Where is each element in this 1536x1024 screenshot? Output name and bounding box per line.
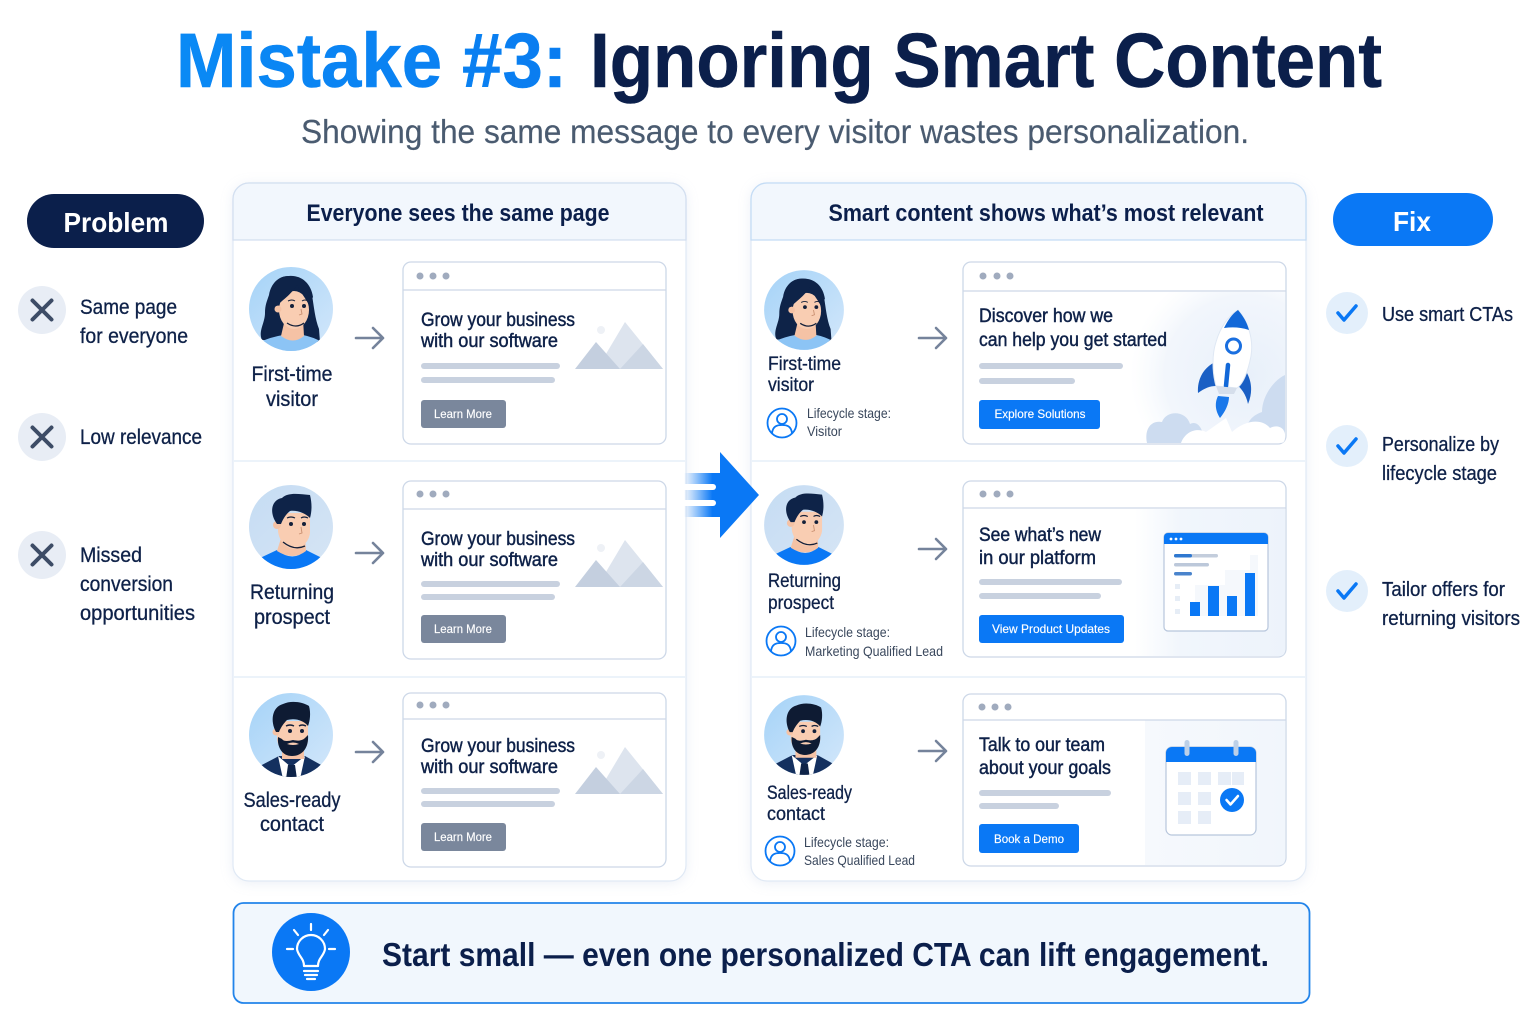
row: sales-ready contact: [764, 694, 1286, 868]
browser: generic page: with our software: [420, 550, 558, 571]
avatar: suited man: [764, 695, 844, 779]
persona label: Returning: [768, 571, 841, 592]
browser: book a demo: [963, 694, 1286, 866]
lifecycle stage: Visitor: [807, 423, 842, 439]
arrow: [919, 539, 946, 559]
fix: use smart CTAs: Use smart CTAs: [1382, 304, 1513, 326]
browser: generic page: [403, 693, 666, 867]
avatar: woman: [249, 267, 333, 355]
panel: same page: [233, 183, 686, 881]
row: returning prospect: [249, 481, 666, 659]
arrow: [919, 328, 946, 348]
panel: fix column: [1326, 193, 1520, 630]
browser: generic page: [403, 262, 666, 444]
avatar: man: [249, 485, 333, 573]
browser: discover page: Discover how we: [979, 306, 1113, 327]
persona label: visitor: [768, 375, 815, 396]
icon: lightbulb: [272, 913, 350, 991]
browser: platform updates: See what’s new: [979, 525, 1101, 546]
persona label: [250, 581, 334, 629]
problem pill: [27, 194, 204, 248]
lifecycle stage: Marketing Qualified Lead: [805, 643, 943, 659]
persona label: prospect: [768, 593, 835, 614]
fix: tailor offers: Tailor offers for: [1382, 579, 1505, 601]
panel header: [751, 183, 1306, 240]
panel: problem column: [18, 194, 204, 625]
problem: same page: Same page: [80, 296, 177, 319]
panel: smart content: [751, 183, 1306, 881]
persona label: contact: [767, 804, 826, 825]
arrow: [356, 742, 383, 762]
lifecycle stage: [768, 405, 891, 439]
title: Mistake #3:: [176, 18, 567, 104]
persona label: contact: [260, 813, 324, 836]
problem pill: Problem: [64, 207, 168, 238]
fix pill: Fix: [1393, 206, 1431, 237]
browser: discover page: [963, 262, 1286, 444]
panel header: Everyone sees the same page: [306, 200, 610, 227]
browser: platform updates: View Product Updates: [992, 622, 1110, 636]
arrow: [919, 741, 946, 761]
browser: generic page: Learn More: [434, 622, 492, 636]
fix pill: [1333, 193, 1493, 246]
callout: [234, 903, 1310, 1003]
problem: missed opportunities: [18, 531, 195, 625]
browser: book a demo: Talk to our team: [979, 735, 1105, 756]
fix: personalize by lifecycle stage: Personalize by: [1382, 434, 1499, 456]
lifecycle stage: Lifecycle stage:: [805, 624, 890, 640]
lifecycle stage: Lifecycle stage:: [807, 405, 891, 421]
persona label: [768, 571, 841, 614]
persona label: Returning: [250, 581, 334, 604]
browser: generic page: Learn More: [434, 407, 492, 421]
lifecycle stage: Sales Qualified Lead: [804, 852, 915, 868]
problem: same page: for everyone: [80, 325, 188, 348]
browser: book a demo: Book a Demo: [994, 832, 1064, 846]
illustration: bar chart window: [1164, 533, 1268, 631]
problem: missed opportunities: Missed: [80, 544, 142, 567]
browser: generic page: Grow your business: [421, 529, 575, 550]
arrow: [356, 543, 383, 563]
title: Ignoring Smart Content: [590, 18, 1382, 104]
title: [176, 18, 1382, 104]
browser: book a demo: about your goals: [979, 758, 1111, 779]
persona label: First-time: [768, 354, 841, 375]
fix: tailor offers: [1326, 570, 1520, 630]
fix: use smart CTAs: [1326, 292, 1513, 334]
persona label: [252, 363, 332, 411]
problem: low relevance: [18, 413, 202, 461]
browser: generic page: with our software: [420, 331, 558, 352]
persona label: visitor: [266, 388, 318, 411]
persona label: Sales-ready: [767, 783, 852, 804]
arrow: [356, 328, 383, 348]
browser: discover page: Explore Solutions: [994, 407, 1086, 421]
browser: generic page: [403, 481, 666, 659]
fix: tailor offers: returning visitors: [1382, 608, 1520, 630]
lifecycle stage: [766, 624, 943, 659]
avatar: woman: [764, 270, 844, 354]
persona label: [767, 783, 852, 825]
big transition arrow: [680, 452, 759, 538]
fix: personalize by lifecycle stage: [1326, 425, 1499, 485]
browser: generic page: Grow your business: [421, 736, 575, 757]
panel header: [233, 183, 686, 240]
persona label: [244, 789, 341, 836]
illustration: calendar: [1166, 740, 1256, 835]
browser: discover page: can help you get started: [979, 330, 1167, 351]
row: first-time visitor: [764, 262, 1286, 444]
lifecycle stage: [766, 834, 915, 868]
browser: generic page: Grow your business: [421, 310, 575, 331]
persona label: [768, 354, 841, 396]
avatar: suited man: [249, 693, 333, 781]
fix: personalize by lifecycle stage: lifecycle stage: [1382, 463, 1497, 485]
callout text: Start small — even one personalized CTA can lift engagement.: [382, 936, 1269, 973]
browser: platform updates: [963, 481, 1286, 657]
subtitle: Showing the same message to every visitor wastes personalization.: [301, 113, 1249, 150]
browser: platform updates: in our platform: [979, 548, 1096, 569]
browser: generic page: with our software: [420, 757, 558, 778]
problem: same page: [18, 286, 188, 348]
persona label: First-time: [252, 363, 332, 386]
row: first-time visitor: [249, 262, 666, 444]
illustration: rocket: [1146, 310, 1285, 443]
panel header: Smart content shows what’s most relevant: [828, 200, 1264, 227]
row: sales-ready contact: [244, 693, 666, 867]
avatar: man: [764, 485, 844, 569]
lifecycle stage: Lifecycle stage:: [804, 834, 889, 850]
persona label: Sales-ready: [244, 789, 341, 812]
problem: missed opportunities: conversion: [80, 573, 173, 596]
row: returning prospect: [764, 481, 1286, 659]
browser: generic page: Learn More: [434, 830, 492, 844]
problem: low relevance: Low relevance: [80, 426, 202, 449]
persona label: prospect: [254, 606, 330, 629]
problem: missed opportunities: opportunities: [80, 602, 195, 625]
